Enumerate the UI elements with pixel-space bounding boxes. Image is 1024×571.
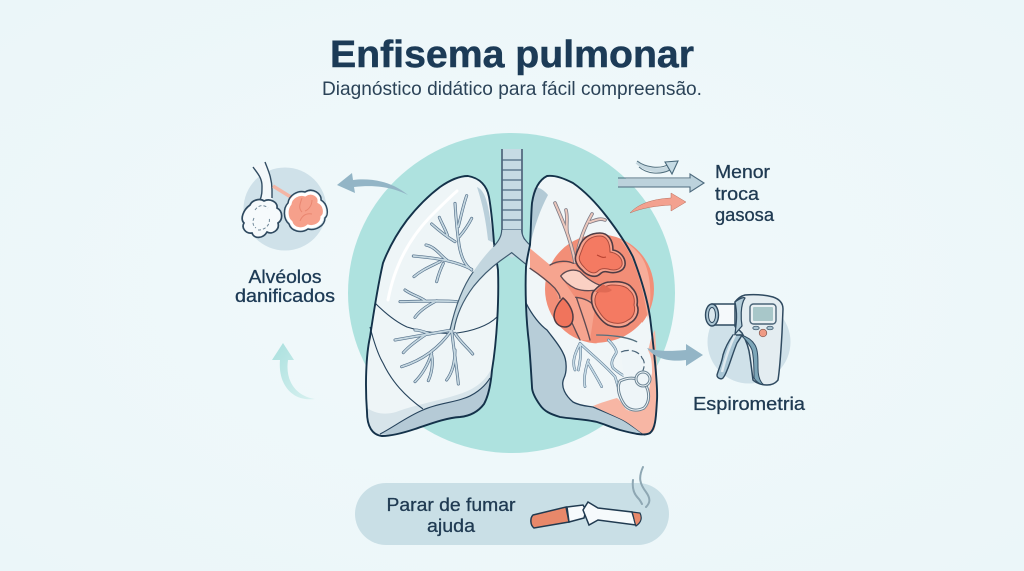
- label: alveolos danificados: [235, 267, 335, 306]
- left lung: [366, 176, 498, 436]
- subtitle: Diagnóstico didático para fácil compreensão.: [322, 78, 702, 100]
- main bronchi: [450, 230, 557, 330]
- label: alveolos danificados: Alvéolos: [248, 267, 322, 287]
- icon: broken cigarette: [531, 502, 641, 528]
- label: parar de fumar ajuda: ajuda: [427, 516, 476, 536]
- panel: quit smoking pill: [355, 467, 669, 545]
- handle: [717, 335, 742, 379]
- arrow: gas exchange red: [630, 193, 686, 213]
- label: espirometria: Espirometria: [693, 394, 806, 414]
- swollen alveoli middle: [592, 282, 638, 327]
- screen: [750, 304, 776, 324]
- panel: spirometer icon: [706, 295, 790, 385]
- right upper bronchial branches: [555, 203, 605, 262]
- swollen alveolus small: [554, 298, 573, 327]
- arrow: gas exchange small top: [637, 161, 678, 174]
- right lung: [526, 176, 657, 435]
- body side strip: [741, 335, 764, 385]
- panel: lungs illustration: [366, 149, 657, 436]
- label: menor troca gasosa: [715, 162, 775, 225]
- arrow: to spirometry: [647, 344, 703, 366]
- icon: smoke: [633, 467, 649, 507]
- label: menor troca gasosa: Menor: [715, 162, 770, 182]
- label: menor troca gasosa: gasosa: [715, 205, 775, 225]
- neck: [735, 298, 745, 334]
- swollen alveoli upper: [575, 233, 625, 276]
- title: Enfisema pulmonar: [330, 34, 694, 76]
- arrow: gas exchange main: [618, 174, 705, 192]
- red damage zone: [593, 330, 657, 435]
- label: parar de fumar ajuda: [386, 495, 516, 536]
- body: [735, 295, 783, 385]
- trachea: [492, 149, 532, 258]
- label: alveolos danificados: danificados: [235, 286, 335, 306]
- teal background circle: [348, 133, 675, 453]
- healthy alveoli cluster: [242, 200, 282, 237]
- button: [759, 329, 767, 337]
- arrow: upward teal: [272, 343, 315, 399]
- damaged alveoli cluster: [287, 193, 324, 229]
- label: menor troca gasosa: troca: [715, 184, 760, 204]
- salmon bronchial lines: [530, 248, 605, 340]
- left bronchial tree: [395, 196, 473, 384]
- label: parar de fumar ajuda: Parar de fumar: [386, 495, 516, 515]
- panel: alveoli icon: [242, 162, 327, 250]
- arrow: to damaged alveoli: [337, 173, 408, 195]
- ruptured alveoli lower: [618, 350, 650, 410]
- lower bronchial branches: [574, 335, 637, 393]
- mouthpiece: [712, 304, 737, 325]
- shaded lower inner lung: [526, 303, 645, 435]
